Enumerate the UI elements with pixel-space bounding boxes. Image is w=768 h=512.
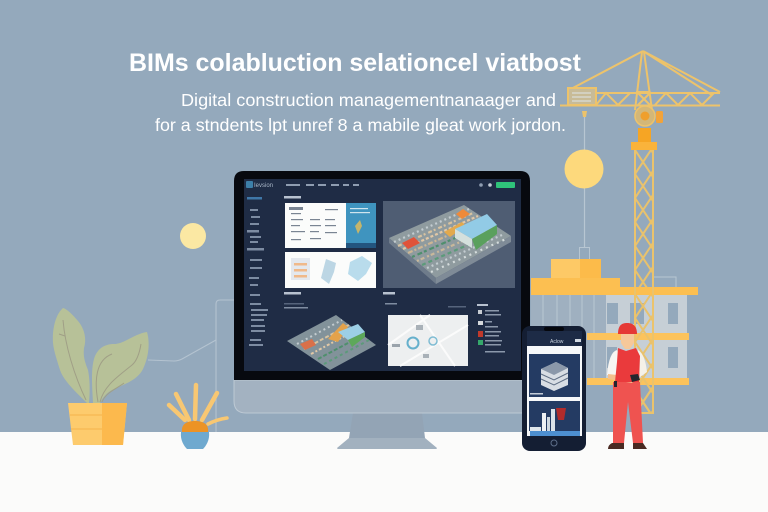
phone model card <box>529 354 580 397</box>
subtitle <box>155 90 566 135</box>
sidebar <box>247 197 268 346</box>
head <box>621 331 634 349</box>
glazing <box>531 295 606 378</box>
floor <box>0 432 768 512</box>
top navigation bar: Ievsion <box>254 183 273 189</box>
hanging line and sun <box>564 117 604 260</box>
phone header: Aclow <box>550 339 564 345</box>
monitor stand <box>337 413 437 449</box>
legs <box>613 382 643 443</box>
white map panel <box>285 252 376 288</box>
white document panel <box>285 203 376 248</box>
top navigation bar <box>246 181 515 189</box>
gloves and belt <box>614 374 640 387</box>
decorative sun: left <box>180 223 206 249</box>
phone chart card <box>529 401 580 436</box>
crane mast <box>634 150 654 413</box>
small vase <box>169 385 227 449</box>
monitor bezel <box>234 171 530 380</box>
subtitle: Digital construction managementnanaager and <box>181 90 556 110</box>
subtitle: for a stndents lpt unref 8 a mabile gleat work jordon. <box>155 115 566 135</box>
isometric site model <box>389 205 511 284</box>
crane jib <box>560 51 720 110</box>
building under construction <box>531 259 698 385</box>
red vest <box>615 348 640 382</box>
title: BIMs colabluction selationcel viatbost <box>129 49 582 77</box>
plant <box>53 308 149 445</box>
crane mast front section <box>635 250 653 413</box>
monitor chin <box>234 380 530 413</box>
crane <box>560 51 720 413</box>
smartphone <box>522 326 586 451</box>
construction worker <box>607 323 647 449</box>
section labels <box>284 196 466 308</box>
pot <box>68 403 127 445</box>
orange blocks and slabs <box>531 259 698 385</box>
windows <box>607 303 678 368</box>
white shirt arms <box>607 350 647 383</box>
phone home button <box>551 440 557 446</box>
street map panel <box>388 315 468 366</box>
leaves <box>53 308 149 403</box>
connector wires <box>148 300 234 432</box>
hard hat <box>618 323 637 334</box>
lower 3D model <box>287 315 376 370</box>
crane cab <box>568 88 663 150</box>
phone screen <box>527 346 582 436</box>
boots <box>608 443 647 449</box>
desktop monitor <box>234 171 530 449</box>
dashboard screen <box>244 179 521 371</box>
3D model panel <box>383 201 515 288</box>
activity list <box>477 304 505 352</box>
wall <box>606 295 687 378</box>
